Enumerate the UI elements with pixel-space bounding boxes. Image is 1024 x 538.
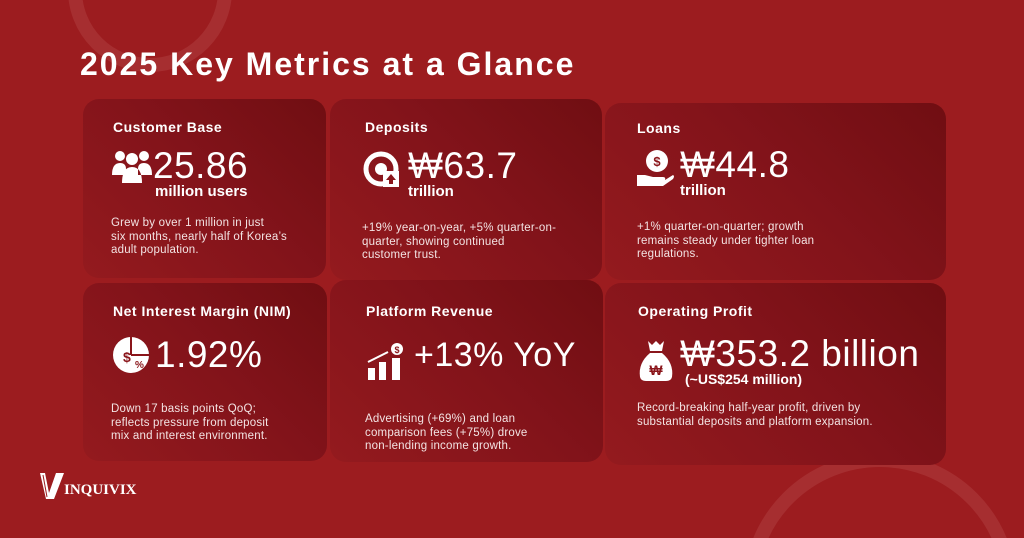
panel: NIM (83, 283, 327, 461)
heading: Platform Revenue (366, 303, 493, 319)
icon: money bag (640, 341, 672, 381)
icon: pie (113, 337, 149, 373)
panel: loans (605, 103, 946, 280)
heading: Customer Base (113, 119, 222, 135)
description: substantial deposits and platform expansion. (637, 416, 873, 428)
heading: Net Interest Margin (NIM) (113, 303, 291, 319)
description: remains steady under tighter loan (637, 234, 814, 246)
description: Down 17 basis points QoQ; (111, 403, 256, 415)
description: regulations. (637, 248, 699, 260)
description: +19% year-on-year, +5% quarter-on- (362, 222, 556, 234)
description: +1% quarter-on-quarter; growth (637, 221, 804, 233)
number: 1.92% (155, 334, 262, 375)
heading: Operating Profit (638, 303, 753, 319)
description: Advertising (+69%) and loan (365, 413, 515, 425)
description (111, 217, 287, 256)
description (637, 402, 873, 428)
unit: (~US$254 million) (685, 371, 802, 387)
heading: Deposits (365, 119, 428, 135)
panel: customer base (83, 99, 326, 278)
description: mix and interest environment. (111, 430, 268, 442)
icon: growth bars (368, 343, 403, 380)
description: quarter, showing continued (362, 236, 505, 248)
icon: pie: $ (123, 349, 131, 365)
number: +13% YoY (414, 336, 576, 374)
number: ₩63.7 (408, 145, 517, 186)
description: Record-breaking half-year profit, driven by (637, 402, 860, 414)
unit: trillion (680, 182, 726, 199)
description: reflects pressure from deposit (111, 416, 268, 428)
panel: platform revenue (330, 280, 603, 462)
description: customer trust. (362, 249, 441, 261)
icon: hand coin: $ (653, 154, 661, 169)
icon: money bag: ₩ (649, 362, 663, 378)
logo: INQUIVIX (64, 482, 137, 498)
description: non-lending income growth. (365, 440, 511, 452)
icon: deposit (364, 152, 399, 187)
description: comparison fees (+75%) drove (365, 426, 528, 438)
description: adult population. (111, 244, 199, 256)
panel: deposits (330, 99, 602, 280)
description (362, 222, 556, 261)
description (365, 413, 528, 452)
unit: trillion (408, 183, 454, 200)
number: 25.86 (153, 145, 248, 186)
number: ₩353.2 billion (680, 333, 919, 374)
description (637, 221, 814, 260)
description: Grew by over 1 million in just (111, 217, 264, 229)
number: ₩44.8 (680, 144, 789, 185)
description (111, 403, 268, 442)
description: six months, nearly half of Korea’s (111, 230, 287, 242)
icon: hand coin (637, 150, 674, 186)
logo (40, 473, 137, 499)
icon: people (112, 151, 152, 183)
title: 2025 Key Metrics at a Glance (80, 46, 575, 82)
icon: growth bars: $ (394, 345, 400, 355)
unit: million users (155, 183, 248, 200)
panel: operating profit (605, 283, 946, 465)
icon: pie: % (135, 360, 144, 371)
heading: Loans (637, 120, 681, 136)
